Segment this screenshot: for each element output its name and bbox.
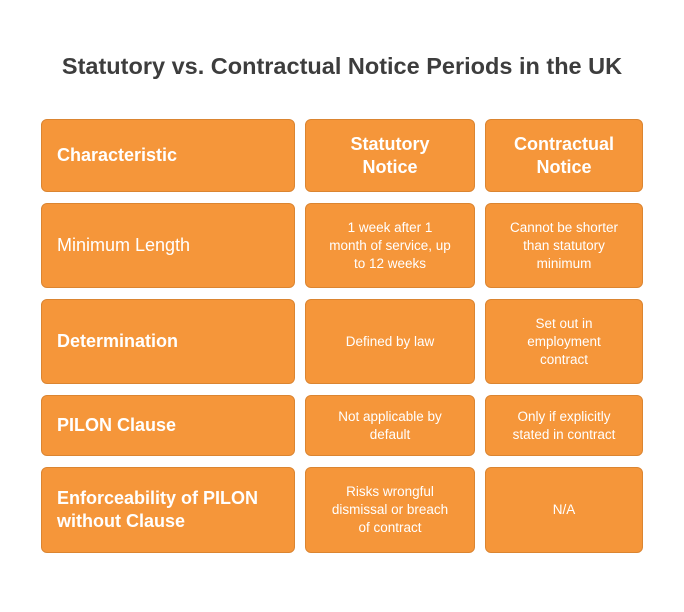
row: Minimum Length: Minimum Length — [57, 235, 190, 255]
row: PILON Clause: PILON Clause — [57, 415, 176, 435]
title: Statutory vs. Contractual Notice Periods in the UK — [62, 53, 622, 79]
cell: Not applicable by — [338, 408, 442, 424]
cell — [305, 395, 475, 456]
cell: default — [370, 426, 410, 442]
cell — [485, 203, 643, 288]
cell: Risks wrongful — [346, 484, 434, 499]
row: Determination: Determination — [57, 331, 178, 351]
row: Minimum Length — [41, 203, 295, 288]
cell: 1 week after 1 — [348, 220, 432, 234]
header: Statutory Notice: Notice — [362, 156, 418, 176]
cell: dismissal or breach — [332, 502, 448, 517]
row: PILON Clause — [41, 395, 295, 456]
cell: contract — [540, 352, 588, 366]
row: Enforceability — [41, 467, 295, 553]
header: Statutory Notice: Statutory — [350, 134, 430, 154]
row: Enforceability: Enforceability of PILON — [57, 488, 258, 508]
cell: Cannot be shorter — [510, 220, 618, 234]
cell: Only if explicitly — [517, 408, 611, 424]
cell: to 12 weeks — [354, 256, 426, 270]
cell — [485, 467, 643, 553]
cell: month of service, up — [329, 238, 451, 252]
header: Contractual Notice: Notice — [536, 156, 592, 176]
header: Statutory Notice — [305, 119, 475, 192]
header: Contractual Notice: Contractual — [514, 134, 614, 154]
cell: N/A — [553, 502, 575, 517]
table — [41, 119, 643, 553]
cell: Set out in — [535, 316, 593, 330]
cell — [305, 467, 475, 553]
header: Characteristic — [41, 119, 295, 192]
cell: Defined by law — [346, 334, 434, 348]
header: Characteristic: Characteristic — [57, 145, 177, 165]
cell — [305, 203, 475, 288]
row: Enforceability: without Clause — [57, 511, 185, 531]
cell: minimum — [537, 256, 591, 270]
cell — [305, 299, 475, 384]
header: Contractual Notice — [485, 119, 643, 192]
cell — [485, 299, 643, 384]
cell: of contract — [358, 520, 422, 535]
cell — [485, 395, 643, 456]
cell: than statutory — [523, 238, 605, 252]
row: Determination — [41, 299, 295, 384]
cell: stated in contract — [513, 426, 615, 442]
cell: employment — [527, 334, 601, 348]
